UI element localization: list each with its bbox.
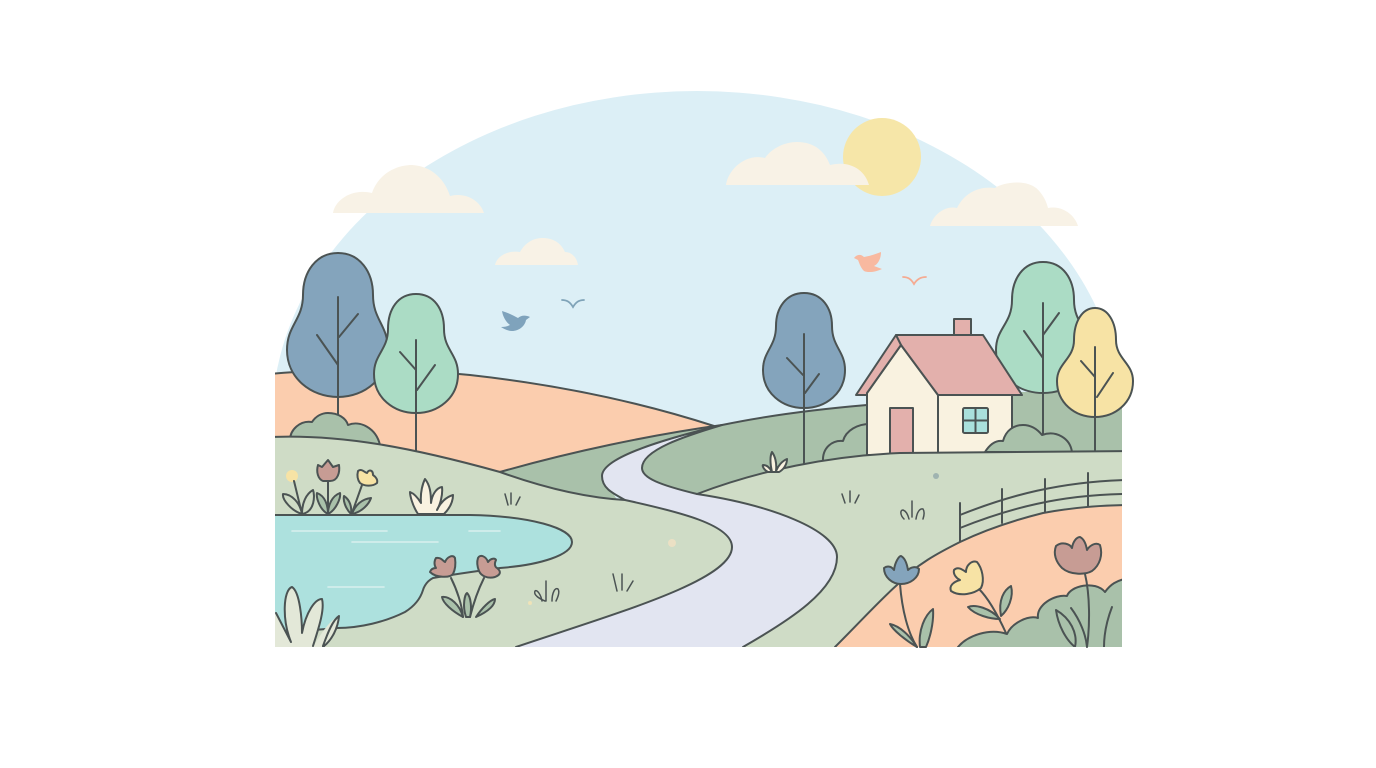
grass tuft: right hill lower [901, 501, 924, 519]
peach foreground hill [835, 505, 1130, 655]
clipped ground layers [270, 253, 1130, 660]
lake ripples [292, 531, 500, 587]
bird: small orange [903, 277, 926, 284]
plant: cream fan [410, 479, 453, 514]
peach back hill [270, 370, 714, 472]
flower: blue [884, 556, 933, 647]
sky dome [276, 91, 1096, 499]
wedge top line [500, 425, 722, 472]
dark green right hill [642, 392, 1130, 500]
tree: mint left [374, 294, 458, 452]
grass tuft: right hill [842, 491, 859, 503]
fence [960, 473, 1125, 542]
dot: cream [668, 539, 676, 547]
cloud: upper left [333, 165, 484, 213]
dot: small yellow [528, 601, 532, 605]
pond flowers [430, 556, 500, 617]
front wall [867, 345, 938, 455]
flower: yellow bud [344, 470, 377, 514]
road [520, 434, 836, 647]
tree: yellow [1057, 308, 1133, 450]
tree: blue centre [763, 293, 845, 468]
chimney [954, 319, 971, 338]
flower: rose large [1055, 537, 1101, 647]
cloud: upper right [930, 182, 1078, 226]
tree: mint right [995, 261, 1078, 434]
roof gable line [896, 335, 901, 345]
light green left hill [270, 437, 732, 655]
light green right hill [697, 451, 1130, 655]
bird: blue [501, 311, 530, 331]
bush: foreground right [957, 578, 1122, 647]
bush leaves [1056, 607, 1112, 647]
lake [270, 515, 572, 634]
hill ridge line [722, 405, 867, 425]
plant: small cream by tree [763, 452, 787, 472]
bird: orange [854, 252, 882, 272]
bush: right of house [985, 425, 1072, 452]
dot: grey [933, 473, 939, 479]
flower: rose tulip [317, 460, 340, 514]
side wall [938, 395, 1012, 453]
grass tuft: near lake [505, 493, 520, 505]
house [856, 319, 1022, 455]
landscape illustration [275, 91, 1134, 648]
tree: large blue [287, 253, 388, 420]
window [963, 408, 988, 433]
cloud: over sun [726, 142, 869, 185]
flower: yellow large [950, 562, 1012, 633]
bird: small blue [562, 300, 584, 307]
plant: bottom left [270, 587, 339, 650]
roof [856, 335, 1022, 395]
grass tuft: lawn centre [613, 574, 633, 591]
grass tuft: lawn left [535, 581, 559, 601]
door [890, 408, 913, 455]
bush: left [290, 413, 380, 445]
cloud: small centre [495, 238, 578, 265]
road inner and outer edge lines [602, 425, 722, 500]
bush: beside house [823, 424, 870, 462]
sun [843, 118, 921, 196]
dark green wedge [504, 428, 704, 498]
flower: yellow dot on stem [283, 470, 314, 514]
